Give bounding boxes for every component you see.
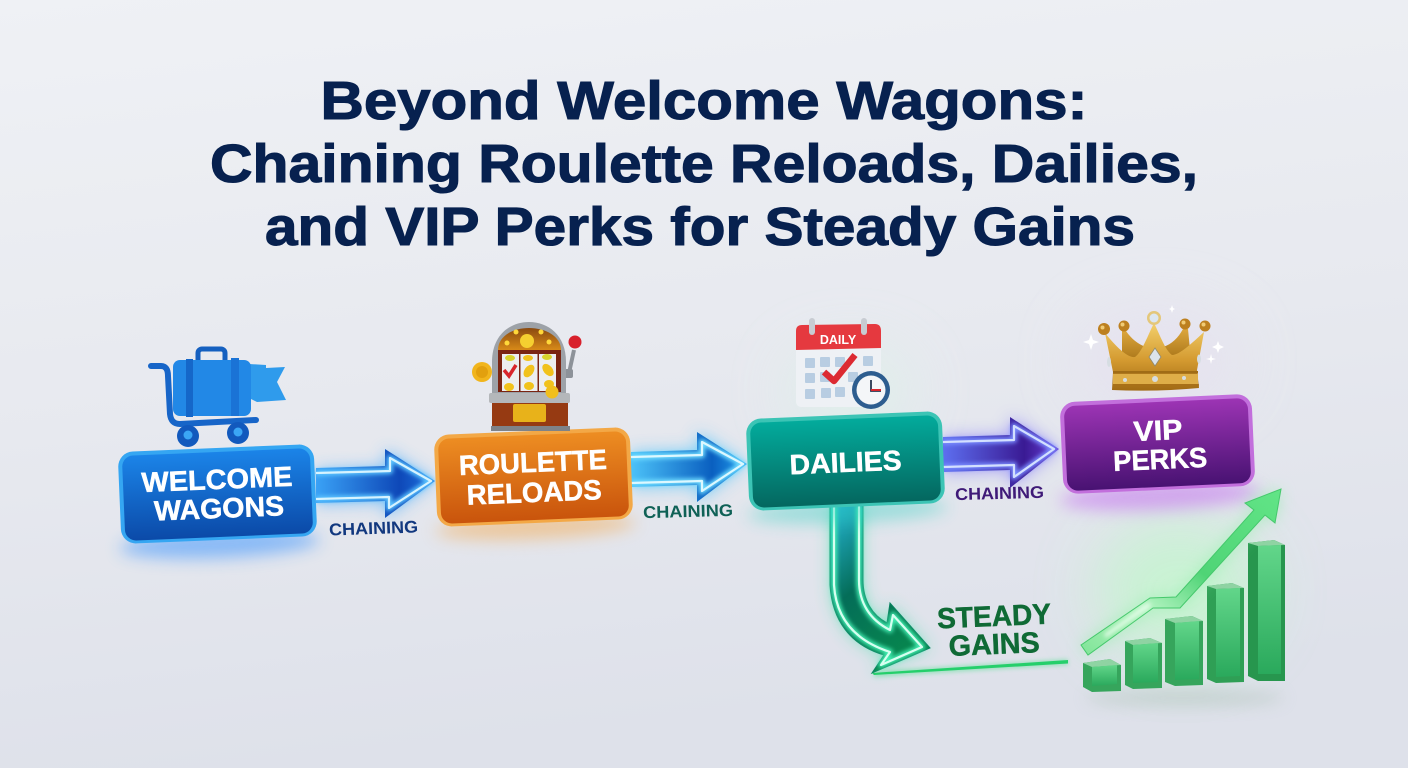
node: vip perks: PERKS — [1113, 442, 1208, 477]
title — [210, 71, 1198, 257]
bar 4 — [1207, 583, 1244, 683]
label: chaining 1: CHAINING — [329, 517, 418, 540]
node: welcome wagons: WELCOME — [141, 461, 293, 498]
node: roulette reloads — [432, 427, 636, 543]
label: chaining 2: CHAINING — [643, 501, 733, 522]
chart: rising green bars — [1083, 540, 1285, 706]
label: steady gains: STEADY — [936, 599, 1052, 635]
bar 3 — [1165, 616, 1203, 686]
node: vip perks: VIP — [1133, 414, 1183, 447]
title: Beyond Welcome Wagons: — [320, 71, 1088, 131]
icon: daily calendar: DAILY — [820, 333, 857, 347]
label: steady gains: GAINS — [948, 627, 1040, 663]
bar 2 — [1125, 638, 1162, 689]
label: chaining 3: CHAINING — [955, 483, 1044, 504]
icon: slot machine — [472, 322, 582, 431]
bar 5 — [1248, 540, 1285, 681]
node: vip perks — [1056, 394, 1260, 514]
node: roulette reloads: ROULETTE — [458, 444, 607, 481]
arrow: growth trend — [1081, 489, 1281, 655]
node: roulette reloads: RELOADS — [466, 474, 602, 511]
icon: gold crown — [1083, 305, 1224, 391]
icon: daily calendar — [796, 318, 890, 409]
node: welcome wagons: WAGONS — [154, 490, 285, 527]
arrow: roulette reloads to dailies — [631, 432, 747, 502]
node: welcome wagons — [116, 444, 320, 562]
title: Chaining Roulette Reloads, Dailies, — [210, 134, 1198, 194]
arrow: welcome wagons to roulette reloads — [316, 449, 435, 518]
arrow: dailies to steady gains — [830, 505, 1068, 675]
node: dailies — [744, 411, 948, 527]
node: dailies: DAILIES — [789, 445, 902, 480]
arrow: dailies to vip perks — [943, 417, 1059, 488]
title: and VIP Perks for Steady Gains — [265, 197, 1135, 257]
label: steady gains — [936, 599, 1052, 663]
bar 1 — [1083, 659, 1121, 692]
icon: luggage cart — [151, 349, 286, 447]
